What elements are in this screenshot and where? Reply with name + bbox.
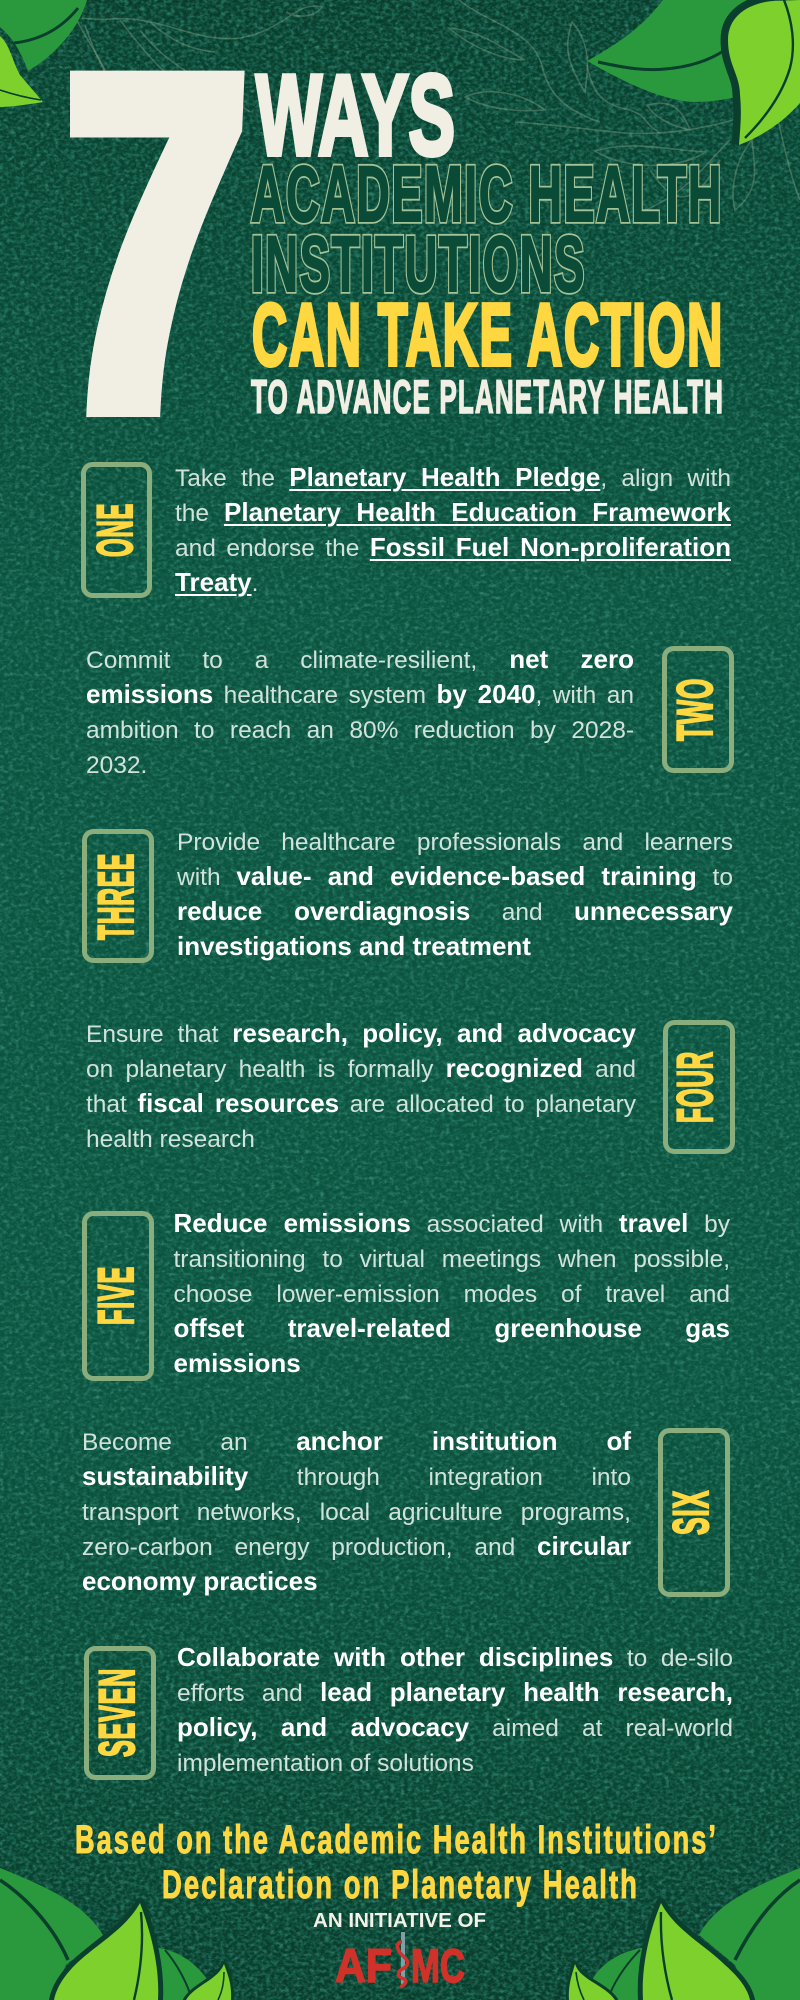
badge: FOUR: FOUR	[667, 1051, 723, 1123]
text: step three: with value- and evidence-based training to	[177, 861, 733, 891]
title: WAYS: WAYS	[256, 52, 455, 180]
leaves: bottom right	[569, 1868, 800, 2000]
text: step two: emissions healthcare system by 2040, with an	[86, 679, 634, 709]
text: step four: that fiscal resources are allocated to planetary	[86, 1088, 636, 1118]
badge: SIX: SIX	[663, 1490, 719, 1535]
text: step six: zero-carbon energy production, and circular	[82, 1531, 631, 1561]
text: step five: emissions	[174, 1348, 301, 1378]
text: step three	[177, 829, 733, 961]
text: step five: offset travel-related greenhouse gas	[174, 1313, 730, 1343]
text: step six	[82, 1426, 632, 1596]
text: step two: 2032.	[86, 752, 147, 779]
step four	[86, 1018, 735, 1154]
text: step six: sustainability through integration into	[82, 1461, 631, 1491]
text: step one: and endorse the Fossil Fuel Non-proliferation	[175, 532, 731, 562]
step six	[82, 1426, 730, 1597]
badge: TWO: TWO	[667, 678, 723, 741]
leaves: bottom left	[0, 1868, 231, 2000]
logo: AFMC	[335, 1932, 465, 1992]
step five	[82, 1208, 730, 1381]
text: step five	[174, 1208, 730, 1378]
step two	[86, 644, 734, 779]
step three	[82, 829, 733, 963]
text: step two: Commit to a climate-resilient, net zero	[86, 644, 634, 674]
badge: FIVE: FIVE	[88, 1266, 144, 1325]
text: step seven: efforts and lead planetary health research,	[177, 1677, 733, 1707]
badge: THREE: THREE	[88, 853, 144, 940]
badge: THREE	[82, 829, 154, 963]
text: step three: Provide healthcare professionals and learners	[177, 829, 733, 856]
badge: FOUR	[663, 1020, 735, 1154]
badge: ONE	[81, 462, 152, 598]
text: step three: investigations and treatment	[177, 931, 531, 961]
text: step six: economy practices	[82, 1566, 318, 1596]
text: step five: transitioning to virtual meetings when possible,	[174, 1246, 730, 1273]
text: step one: the Planetary Health Education Framework	[175, 497, 731, 527]
text: step three: reduce overdiagnosis and unnecessary	[177, 896, 733, 926]
badge: SEVEN: SEVEN	[89, 1668, 145, 1757]
badge: SEVEN	[84, 1646, 156, 1780]
text: step two	[86, 644, 634, 779]
badge: ONE: ONE	[87, 503, 143, 557]
leaves: top left	[0, 0, 87, 107]
line art: top left branch	[70, 5, 322, 112]
text: step five: choose lower-emission modes of travel and	[174, 1281, 730, 1308]
title: INSTITUTIONS	[251, 219, 586, 308]
logo: AFMC: AF	[335, 1939, 392, 1992]
text: step one: Take the Planetary Health Pledge, align with	[175, 462, 731, 492]
text: step four: Ensure that research, policy, and advocacy	[86, 1018, 636, 1048]
leaves: top right	[587, 0, 800, 145]
text: step four: health research	[86, 1126, 255, 1153]
text: step two: ambition to reach an 80% reduction by 2028-	[86, 717, 634, 744]
text: step four: on planetary health is formally recognized and	[86, 1053, 636, 1083]
badge: TWO	[662, 646, 734, 773]
line art: top right branch	[449, 0, 800, 213]
badge: SIX	[658, 1428, 730, 1597]
text: step seven: Collaborate with other disciplines to de-silo	[177, 1642, 733, 1672]
text: step seven: policy, and advocacy aimed at real-world	[177, 1712, 733, 1742]
text: step seven	[177, 1642, 733, 1777]
text: step seven: implementation of solutions	[177, 1750, 474, 1777]
text: step one	[175, 462, 731, 597]
text: step six: transport networks, local agriculture programs,	[82, 1499, 631, 1526]
text: step four	[86, 1018, 636, 1153]
text: step five: Reduce emissions associated with travel by	[174, 1208, 730, 1238]
initiative caption: AN INITIATIVE OF	[313, 1910, 486, 1932]
logo: AFMC: MC	[411, 1939, 465, 1992]
text: step six: Become an anchor institution of	[82, 1426, 631, 1456]
step one	[81, 462, 731, 598]
text: step one: Treaty.	[175, 567, 258, 597]
badge: FIVE	[82, 1211, 154, 1381]
step seven	[84, 1642, 733, 1780]
